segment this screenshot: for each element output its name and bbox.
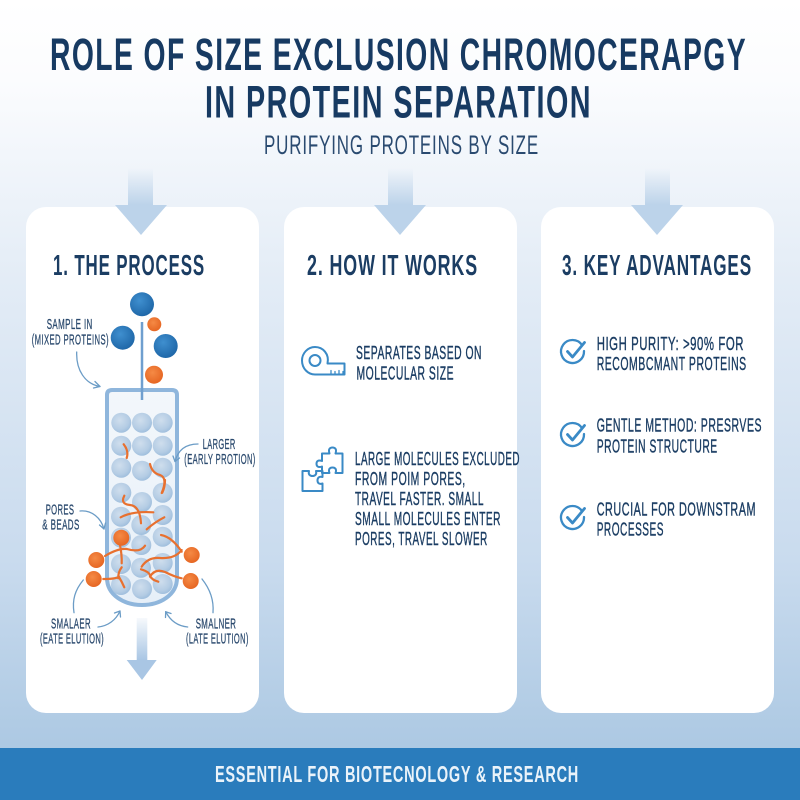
- protein strands: [103, 444, 182, 587]
- text: separates by size: [356, 342, 482, 383]
- label: sample in: (MIXED PROTEINS): [32, 332, 109, 348]
- small proteins: orange spheres: [86, 317, 200, 589]
- heading: the process: 1. THE PROCESS: [53, 250, 205, 282]
- text: large and small molecules: TRAVEL FASTER. SMALL: [355, 488, 484, 509]
- panel: how it works: [284, 207, 517, 713]
- arrow: pores and beads: [80, 511, 106, 529]
- text: separates by size: MOLECULAR SIZE: [356, 362, 454, 383]
- heading: how it works: 2. HOW IT WORKS: [307, 250, 478, 282]
- text: large and small molecules: SMALL MOLECULES ENTER: [355, 508, 501, 529]
- label: smaller early: (EATE ELUTION): [40, 631, 104, 647]
- icon: check high purity: [561, 340, 584, 363]
- arrow: into process panel: [115, 168, 167, 235]
- label: smaller late: (LATE ELUTION): [186, 631, 249, 647]
- text: large and small molecules: LARGE MOLECULES EXCLUDED: [355, 448, 520, 469]
- label: smaller early: SMALAER: [51, 616, 91, 632]
- text: large and small molecules: [355, 448, 520, 549]
- arrow: into how it works panel: [374, 168, 426, 235]
- label: pores and beads: PORES: [46, 502, 74, 518]
- arrows: smaller late: [166, 579, 213, 627]
- column diagram: [86, 292, 200, 605]
- text: high purity: [597, 333, 747, 374]
- label: larger: LARGER: [203, 437, 236, 453]
- subtitle: PURIFYING PROTEINS BY SIZE: [264, 130, 539, 160]
- label: smaller early: [40, 616, 104, 647]
- title: [50, 29, 747, 128]
- text: downstream: PROCESSES: [597, 519, 664, 540]
- large proteins: blue spheres: [111, 292, 178, 358]
- arrow: into advantages panel: [631, 168, 683, 235]
- label: larger: (EARLY PROTION): [184, 452, 256, 468]
- text: gentle method: [597, 415, 762, 456]
- icon: puzzle pieces: [302, 448, 342, 491]
- label: pores and beads: [42, 502, 80, 533]
- label: sample in: [32, 317, 109, 348]
- panel: key advantages: [541, 207, 774, 713]
- icon: check downstream: [561, 506, 584, 529]
- icon: check gentle method: [561, 423, 584, 446]
- label: pores and beads: & BEADS: [42, 517, 80, 533]
- text: large and small molecules: PORES, TRAVEL SLOWER: [355, 528, 488, 549]
- footer band: [0, 748, 800, 800]
- panel: the process: [26, 207, 259, 713]
- arrow: elution outflow: [127, 618, 157, 680]
- arrow: larger: [173, 444, 198, 462]
- label: smaller late: SMALNER: [196, 616, 236, 632]
- icon: measuring tape: [302, 347, 344, 374]
- beads: [111, 413, 173, 599]
- title: IN PROTEIN SEPARATION: [205, 76, 592, 128]
- label: sample in: SAMPLE IN: [47, 317, 93, 333]
- sample feed line: [141, 322, 143, 400]
- column body: [107, 390, 177, 605]
- text: large and small molecules: FROM POIM PORES,: [355, 468, 466, 489]
- label: larger: [184, 437, 256, 468]
- arrows: smaller early: [73, 580, 120, 627]
- arrow: sample in: [77, 352, 100, 388]
- text: downstream: [597, 499, 756, 540]
- label: smaller late: [186, 616, 249, 647]
- footer text: ESSENTIAL FOR BIOTECNOLOGY & RESEARCH: [215, 761, 579, 787]
- text: separates by size: SEPARATES BASED ON: [356, 342, 482, 363]
